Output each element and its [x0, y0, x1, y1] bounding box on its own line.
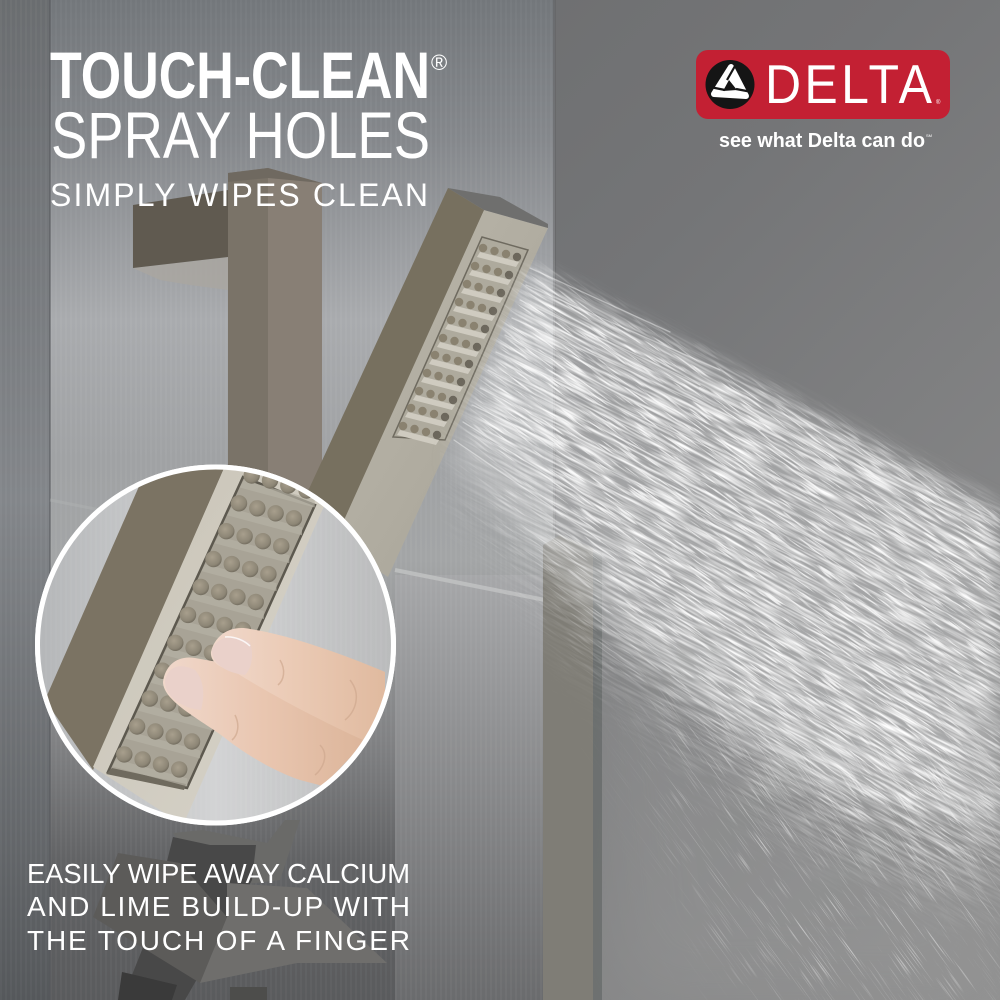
magnified circle: finger wiping spray holes [30, 450, 400, 830]
caption: EASILY WIPE AWAY CALCIUM [27, 858, 410, 889]
lower finger [163, 657, 365, 786]
title: TOUCH-CLEAN [50, 38, 430, 112]
caption: THE TOUCH OF A FINGER [27, 925, 410, 956]
logo emblem [706, 60, 754, 109]
title: ® [431, 50, 447, 75]
logo tagline: see what Delta can do [719, 130, 925, 152]
caption: AND LIME BUILD-UP WITH [27, 891, 410, 922]
Delta logo [696, 50, 950, 119]
caption [27, 858, 410, 956]
title: SPRAY HOLES [51, 98, 430, 172]
water spray [440, 260, 1000, 1000]
upper finger [211, 628, 385, 740]
hand shower head [290, 188, 548, 577]
Delta logo: ® [936, 99, 941, 106]
slide bar and wall bracket [133, 168, 322, 520]
Delta logo: DELTA [765, 54, 932, 116]
title [50, 38, 447, 172]
logo tagline: SM [926, 133, 932, 138]
subtitle: SIMPLY WIPES CLEAN [50, 177, 428, 213]
lower hose bracket [93, 820, 387, 1000]
glass door post [543, 535, 602, 1000]
